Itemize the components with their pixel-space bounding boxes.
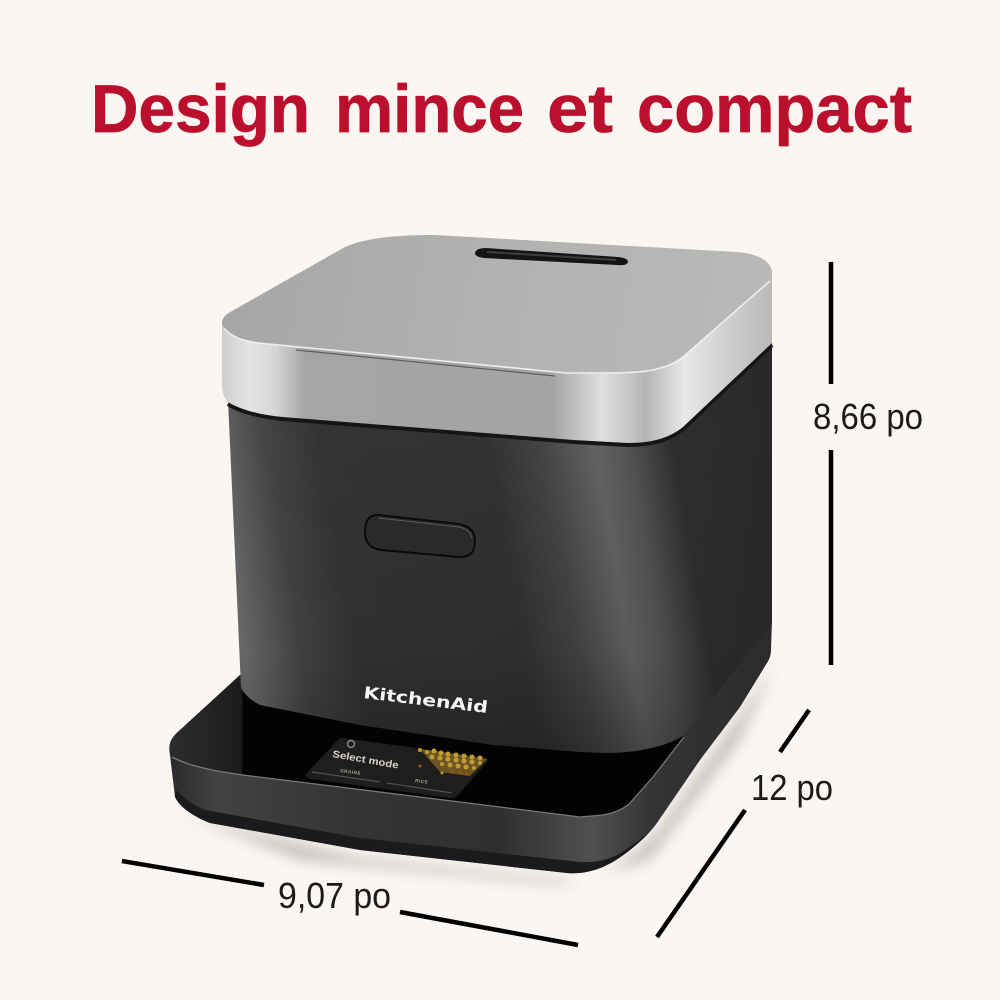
width line left <box>122 861 264 885</box>
height line top <box>829 262 833 384</box>
width line right <box>400 912 578 945</box>
lid control slot <box>475 248 628 265</box>
stainless band <box>222 270 772 443</box>
height line bottom <box>829 450 833 665</box>
depth label: 12 po <box>751 767 833 808</box>
lid rim shadow <box>296 350 555 376</box>
base front highlight <box>172 737 684 817</box>
title: Design <box>91 71 310 147</box>
title: mince <box>335 71 524 147</box>
screen settings icon <box>348 740 354 748</box>
base lower lip <box>175 790 657 873</box>
screen text: select mode: Select mode <box>331 749 400 772</box>
base plate edge <box>169 620 772 873</box>
depth line top <box>780 710 809 752</box>
display screen <box>306 738 488 798</box>
depth line bottom <box>657 810 745 937</box>
front button <box>365 515 475 557</box>
screen text: grains: GRAINS <box>340 768 361 776</box>
width label: 9,07 po <box>278 875 391 916</box>
dimension: depth <box>657 710 833 937</box>
dark gasket <box>228 345 772 445</box>
screen divider lines <box>312 772 452 793</box>
screen gold image <box>420 749 487 776</box>
body lower shading <box>228 330 772 753</box>
lid top <box>222 235 772 373</box>
product: rice cooker <box>169 235 775 885</box>
title <box>91 71 912 147</box>
dimension: width <box>122 861 578 945</box>
screen text: rice: RICE <box>415 778 428 785</box>
main body <box>228 330 772 753</box>
title: compact <box>637 71 912 147</box>
screen gold dots <box>418 748 482 776</box>
base plate top <box>170 675 684 817</box>
base shadow <box>185 665 775 885</box>
lid rim highlight <box>224 281 770 373</box>
height label: 8,66 po <box>813 396 923 437</box>
KitchenAid logo: KitchenAid <box>363 683 489 717</box>
title: et <box>547 71 613 147</box>
